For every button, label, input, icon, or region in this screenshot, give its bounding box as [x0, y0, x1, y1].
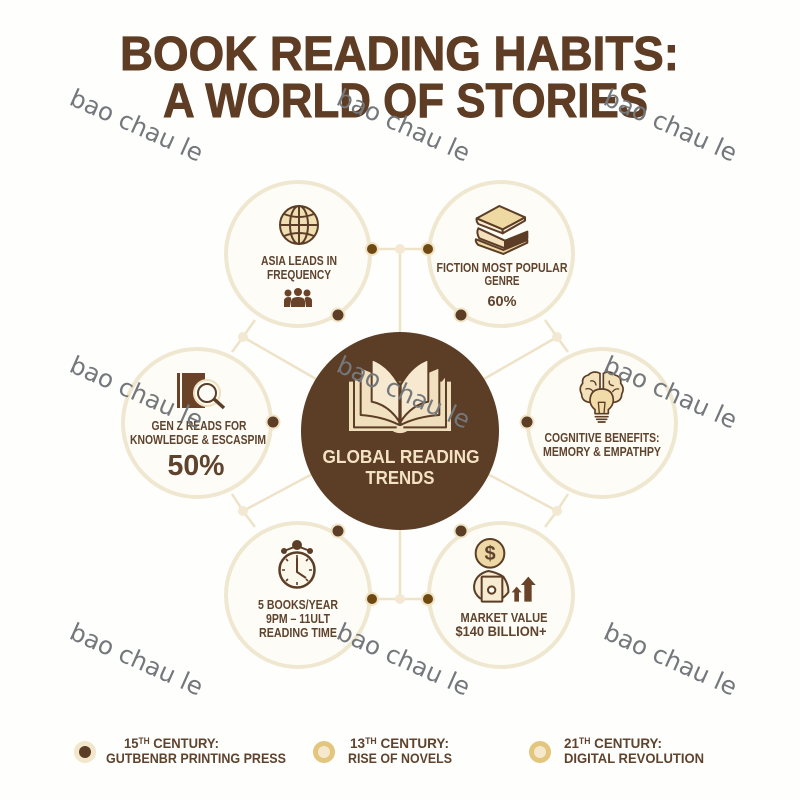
text: legend 13th century: CENTURY: — [377, 735, 449, 751]
text: hub label: TRENDS — [366, 468, 434, 488]
text: Gen Z — [130, 419, 266, 482]
icon: alarm clock — [280, 540, 314, 588]
text: fiction: GENRE — [484, 274, 520, 288]
watermark: bao chau le — [66, 350, 208, 434]
text: Gen Z: 50% — [168, 450, 225, 482]
text: fiction — [436, 261, 568, 310]
legend: 21st century — [529, 735, 704, 766]
panel: Gen Z reads — [123, 349, 271, 497]
icon: brain with light bulb — [580, 372, 623, 422]
panel: market value — [429, 523, 573, 667]
panel: fiction most popular genre — [429, 182, 573, 326]
text: market value — [456, 611, 548, 639]
text: legend 13th century: 13 — [350, 735, 366, 751]
text: Asia leads: FREQUENCY — [267, 268, 332, 282]
icon: legend dot gold — [313, 741, 335, 763]
text: legend 13th century — [348, 735, 452, 766]
title: BOOK READING HABITS: — [120, 28, 679, 81]
watermark: bao chau le — [333, 350, 475, 434]
connector network — [232, 244, 568, 604]
text: market value: MARKET VALUE — [460, 611, 548, 625]
panel: cognitive benefits — [528, 349, 676, 497]
watermark: bao chau le — [600, 617, 742, 701]
icon: legend dot gold — [529, 741, 551, 763]
legend: 13th century — [313, 735, 452, 766]
icon: stacked books — [476, 206, 527, 254]
connector dots — [266, 243, 534, 605]
text: legend 15th century: TH — [138, 736, 150, 746]
text: Gen Z: KNOWLEDGE & ESCASPIM — [130, 433, 266, 447]
text: legend 15th century: 15 — [124, 735, 140, 751]
text: legend 15th century — [106, 735, 286, 766]
text: legend 21th century: 21 — [564, 735, 580, 751]
panel: reading time — [226, 523, 370, 667]
text: cognitive: MEMORY & EMPATHPY — [543, 445, 662, 459]
text: Gen Z: GEN Z READS FOR — [152, 419, 246, 433]
text: reading time — [258, 598, 338, 640]
text: legend 15th century: CENTURY: — [150, 735, 219, 751]
text: legend 21th century: TH — [579, 736, 590, 746]
icon: people — [284, 288, 312, 307]
text: market value: $140 BILLION+ — [456, 623, 546, 639]
title: A WORLD OF STORIES — [163, 75, 648, 128]
text: Asia leads — [261, 254, 337, 282]
text: fiction: FICTION MOST POPULAR — [436, 261, 568, 275]
text: legend 15th century: GUTBENBR PRINTING PRESS — [106, 750, 286, 766]
text: reading time: READING TIME — [259, 626, 337, 640]
text: reading time: 9PM – 11ULT — [266, 612, 330, 626]
text: dollar sign: $ — [484, 543, 496, 565]
text: Asia leads: ASIA LEADS IN — [261, 254, 337, 268]
text: hub label: GLOBAL READING — [322, 447, 480, 467]
watermark — [66, 83, 742, 701]
text: legend 21th century: CENTURY: — [590, 735, 662, 751]
icon: person with dollar and arrows — [474, 539, 536, 602]
icon: open book — [349, 359, 451, 433]
icon: globe — [280, 206, 318, 244]
watermark: bao chau le — [66, 617, 208, 701]
watermark: bao chau le — [600, 83, 742, 167]
text: legend 13th century: RISE OF NOVELS — [348, 750, 452, 766]
text: legend 21th century: DIGITAL REVOLUTION — [564, 750, 704, 766]
watermark: bao chau le — [333, 83, 475, 167]
text: cognitive — [543, 431, 662, 459]
icon: legend dot dark — [74, 741, 96, 763]
text: hub label — [322, 447, 480, 488]
text: legend 13th century: TH — [365, 736, 377, 746]
watermark: bao chau le — [600, 350, 742, 434]
text: fiction: 60% — [488, 293, 516, 310]
icon: book and magnifier — [177, 373, 224, 408]
text: legend 21th century — [564, 735, 704, 766]
panel: Asia leads in frequency — [226, 182, 370, 326]
title — [120, 28, 679, 128]
watermark: bao chau le — [66, 83, 208, 167]
text: cognitive: COGNITIVE BENEFITS: — [544, 431, 660, 445]
watermark: bao chau le — [333, 617, 475, 701]
legend: 15th century — [74, 735, 286, 766]
central hub — [301, 332, 499, 530]
text: reading time: 5 BOOKS/YEAR — [258, 598, 338, 612]
